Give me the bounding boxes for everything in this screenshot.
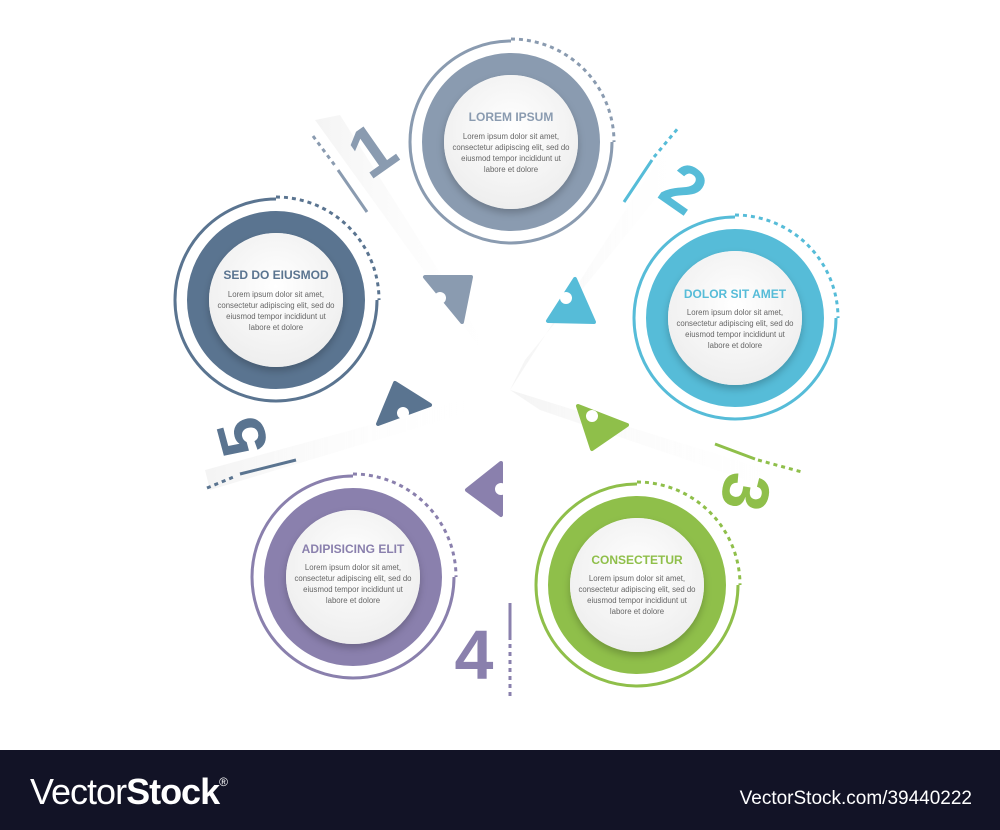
number 2 [624, 127, 720, 229]
circle 5: sed do eiusmod: consectetur adipiscing elit, sed do [217, 301, 335, 310]
footer bar [0, 750, 1000, 830]
circle 3: consectetur: CONSECTETUR [591, 553, 683, 567]
number 5 [202, 410, 296, 488]
number 2: 2 [648, 147, 720, 229]
circle 3: consectetur [536, 482, 740, 686]
circle 1: lorem ipsum: labore et dolore [484, 165, 538, 174]
circle 5: sed do eiusmod [175, 197, 379, 401]
circle 3: consectetur: consectetur adipiscing elit, sed do [578, 585, 696, 594]
circle 3: consectetur: eiusmod tempor incididunt ut [587, 596, 688, 605]
circle 3: consectetur: labore et dolore [610, 607, 664, 616]
circle 5: sed do eiusmod: Lorem ipsum dolor sit amet, [228, 290, 324, 299]
circle 2: dolor sit amet: labore et dolore [708, 341, 762, 350]
circle 4: adipisicing elit: Lorem ipsum dolor sit amet, [305, 563, 401, 572]
number 1: 1 [334, 107, 410, 193]
circle 4: adipisicing elit [252, 474, 456, 678]
number 3: 3 [706, 467, 786, 517]
circle 1: lorem ipsum: consectetur adipiscing elit, sed do [452, 143, 570, 152]
footer bar: ® [219, 775, 228, 789]
wedge shadows [205, 115, 800, 495]
circle 1: lorem ipsum [410, 39, 614, 243]
triangle markers [378, 277, 627, 515]
number 4: 4 [455, 616, 494, 694]
circle 2: dolor sit amet: Lorem ipsum dolor sit amet, [687, 308, 783, 317]
circle 4: adipisicing elit: labore et dolore [326, 596, 380, 605]
number 3 [706, 444, 802, 517]
circle 5: sed do eiusmod: eiusmod tempor incididunt ut [226, 312, 327, 321]
circle 2: dolor sit amet: eiusmod tempor incididunt ut [685, 330, 786, 339]
circle 3: consectetur: Lorem ipsum dolor sit amet, [589, 574, 685, 583]
number 5: 5 [202, 410, 282, 464]
circle 1: lorem ipsum: LOREM IPSUM [469, 110, 553, 124]
circle 5: sed do eiusmod: labore et dolore [249, 323, 303, 332]
number 1 [313, 107, 410, 212]
circle 1: lorem ipsum: Lorem ipsum dolor sit amet, [463, 132, 559, 141]
number 4 [455, 603, 510, 696]
circle 4: adipisicing elit: eiusmod tempor incididunt ut [303, 585, 404, 594]
circle 2: dolor sit amet: DOLOR SIT AMET [684, 287, 787, 301]
circle 1: lorem ipsum: eiusmod tempor incididunt ut [461, 154, 562, 163]
circle 2: dolor sit amet [634, 215, 838, 419]
footer bar: VectorStock.com/39440222 [740, 788, 972, 809]
circle 4: adipisicing elit: consectetur adipiscing elit, sed do [294, 574, 412, 583]
footer bar: VectorStock [30, 771, 219, 812]
circle 5: sed do eiusmod: SED DO EIUSMOD [223, 268, 329, 282]
circle 2: dolor sit amet: consectetur adipiscing elit, sed do [676, 319, 794, 328]
circle 4: adipisicing elit: ADIPISICING ELIT [302, 542, 405, 556]
